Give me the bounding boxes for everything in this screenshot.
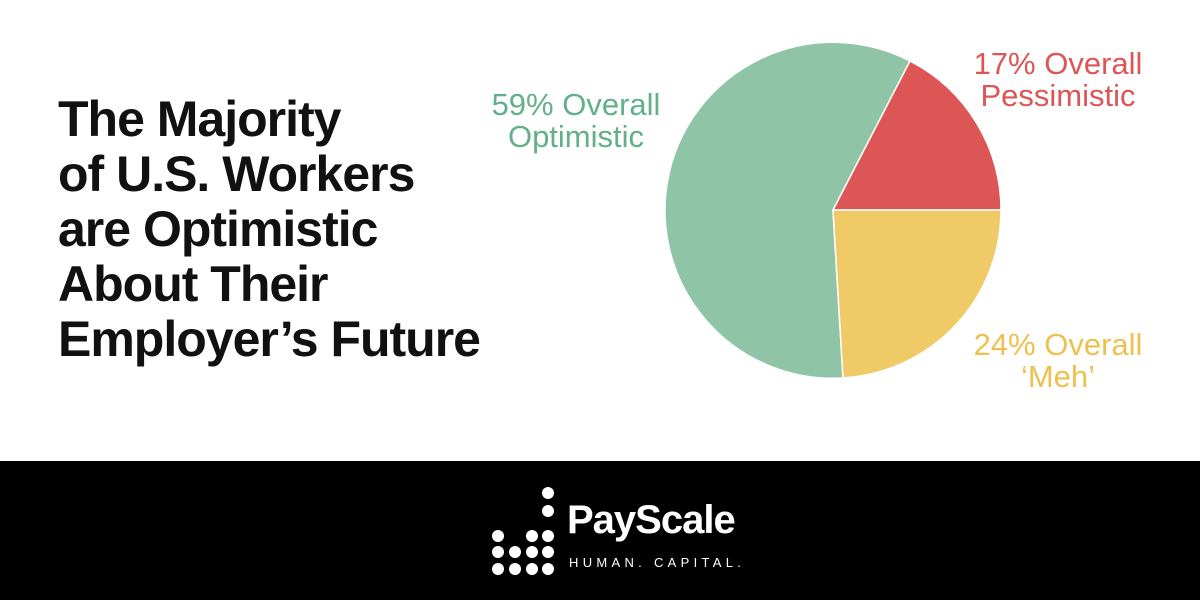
title: The Majority <box>58 91 340 147</box>
label: pessimistic <box>974 46 1142 113</box>
tagline: HUMAN. CAPITAL. <box>569 555 745 570</box>
title: Employer’s Future <box>58 311 480 367</box>
slice: optimistic 59% <box>665 42 910 378</box>
slice: meh 24% <box>833 210 1001 378</box>
title: About Their <box>58 256 328 312</box>
pie chart <box>666 43 1000 378</box>
title <box>58 91 480 367</box>
label: optimistic <box>492 87 660 154</box>
brand name: PayScale <box>567 498 735 542</box>
footer band <box>0 461 1200 600</box>
label: meh <box>974 327 1142 394</box>
label: optimistic: Optimistic <box>508 119 644 154</box>
label: optimistic: 59% Overall <box>492 87 660 122</box>
title: are Optimistic <box>58 201 377 257</box>
icon: dots <box>492 487 554 575</box>
label: meh: 24% Overall <box>974 327 1142 362</box>
title: of U.S. Workers <box>58 146 414 202</box>
logo <box>492 487 745 575</box>
label: pessimistic: Pessimistic <box>980 78 1136 113</box>
label: meh: ‘Meh’ <box>1021 359 1095 394</box>
slice: pessimistic 17% <box>833 61 1001 210</box>
label: pessimistic: 17% Overall <box>974 46 1142 81</box>
